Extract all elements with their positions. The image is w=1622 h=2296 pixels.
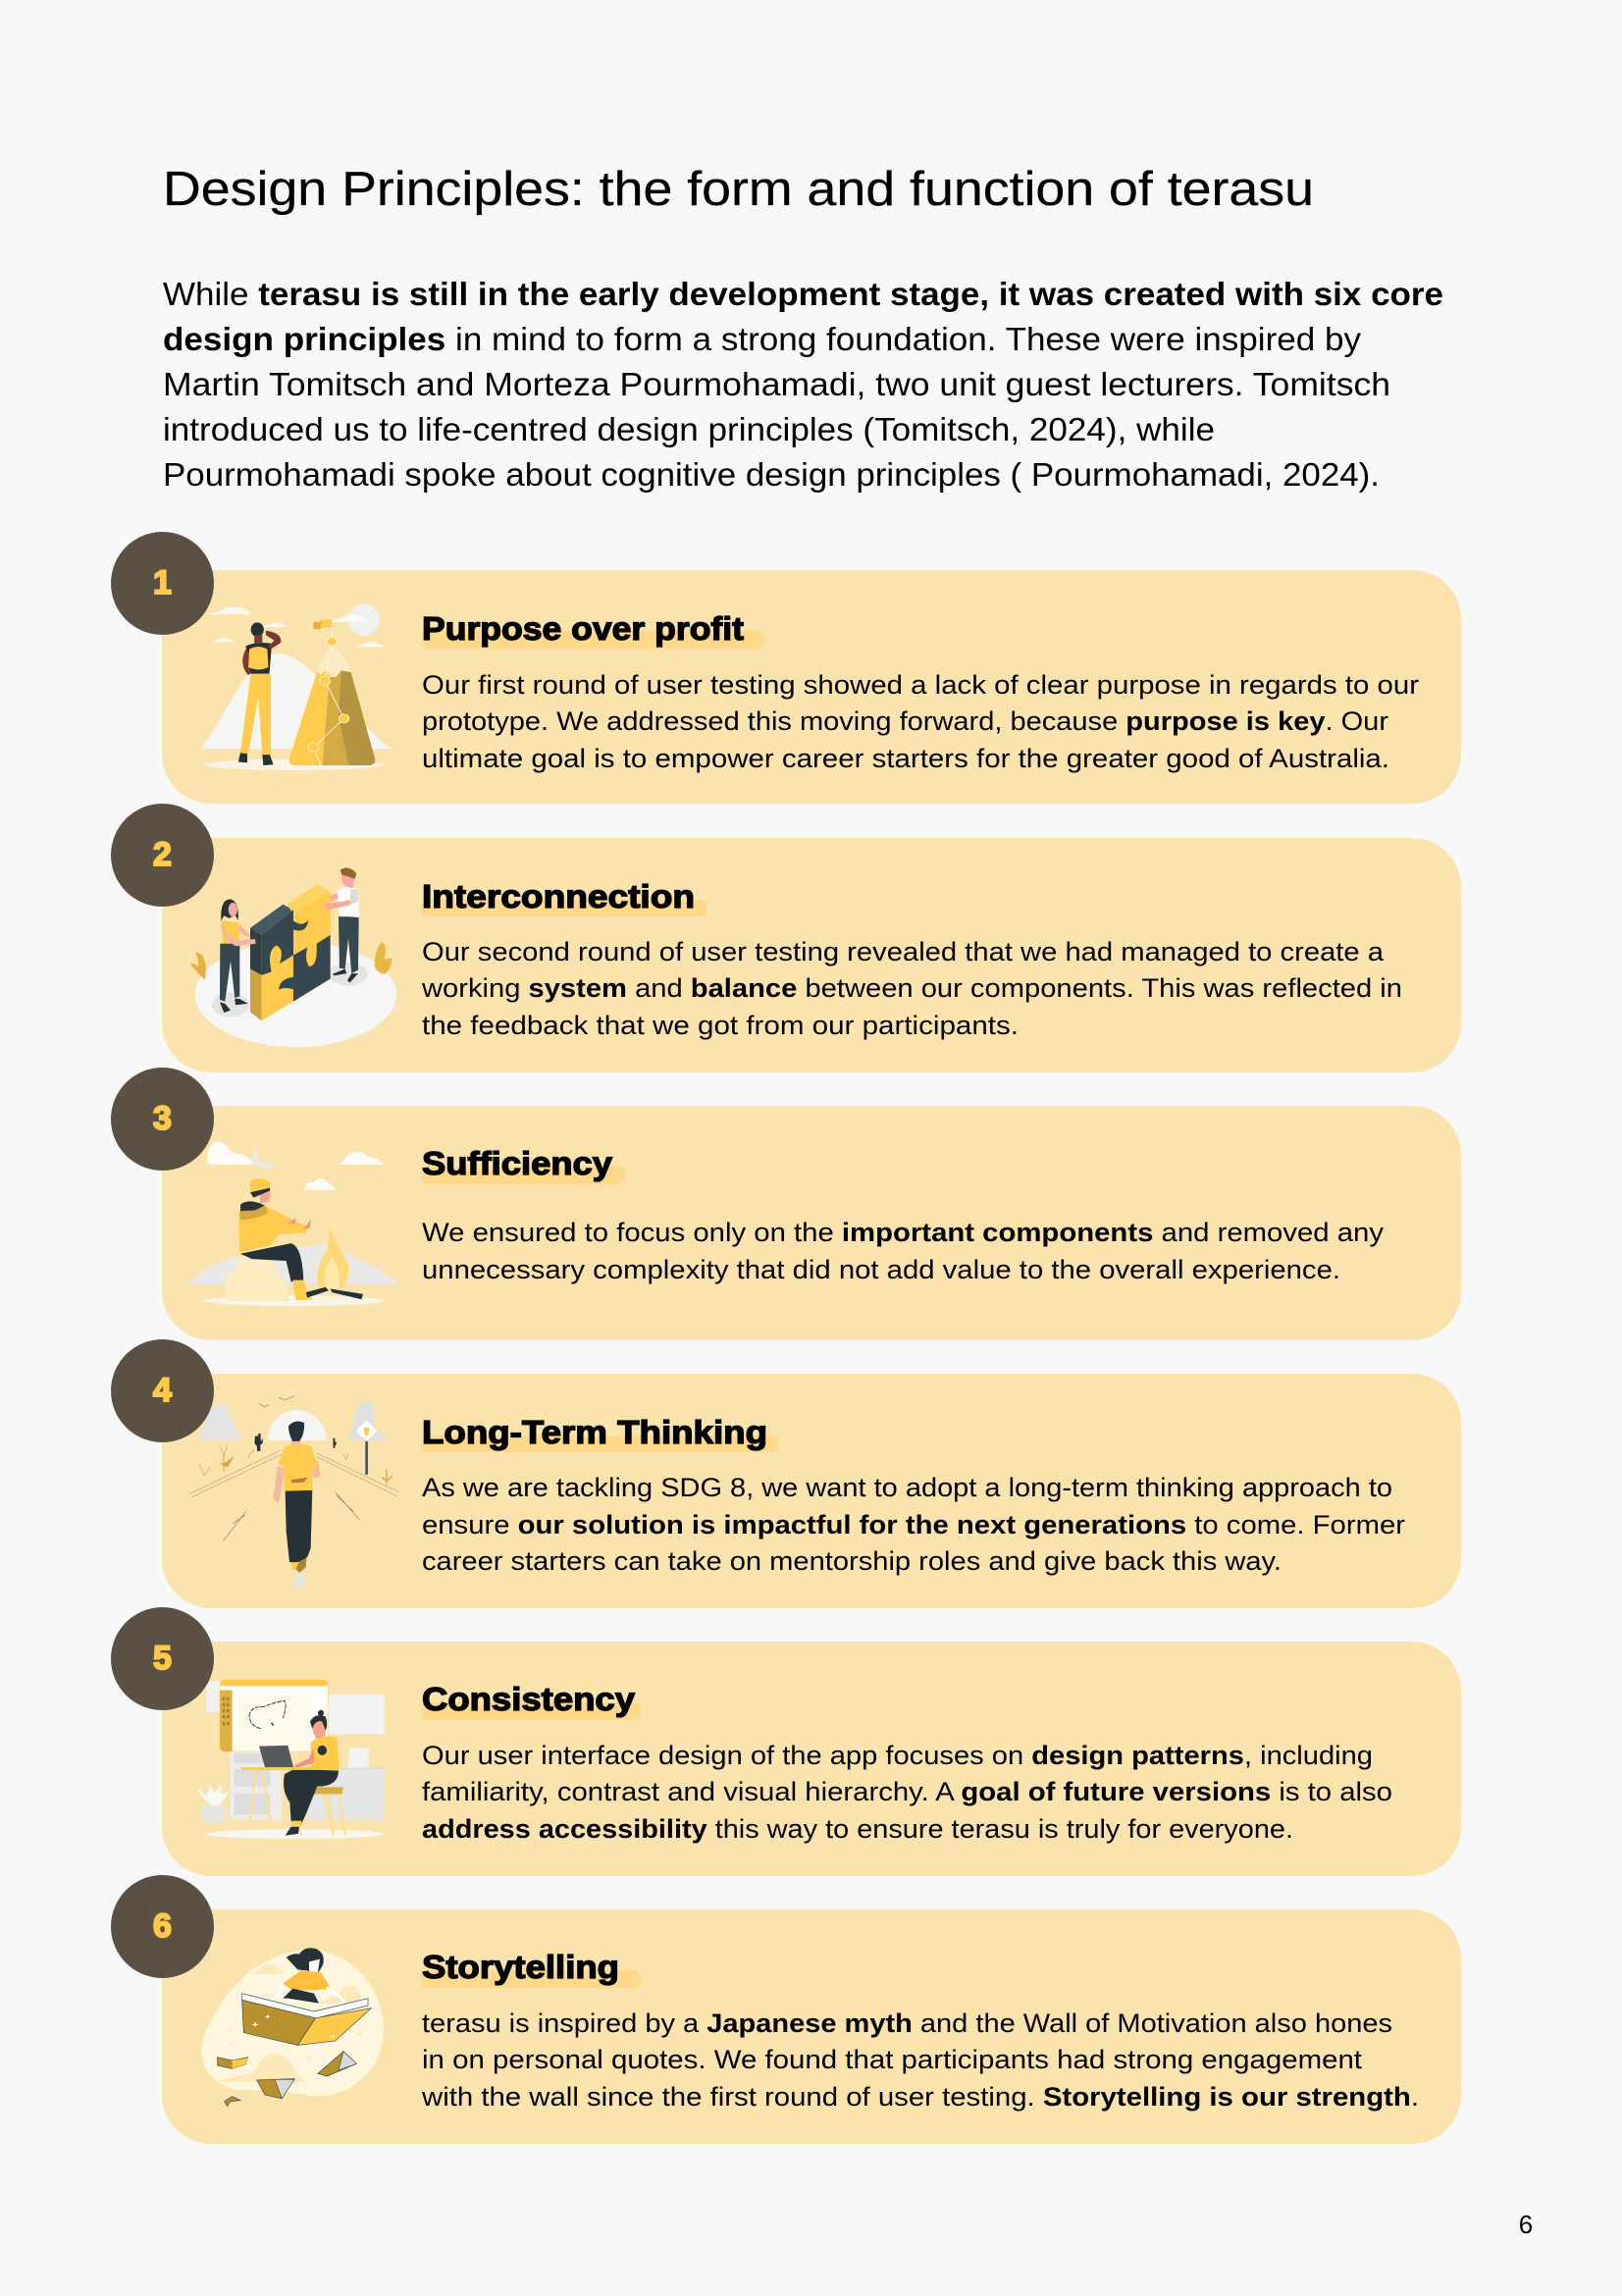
panel: principle 4 long-term thinking: [111, 1339, 1461, 1608]
body text 6: with the wall since the first round of user testing. Storytelling is our strength .: [421, 2082, 1419, 2112]
body text 4: [422, 1473, 1405, 1576]
body text 4: As we are tackling SDG 8, we want to adopt a long-term thinking approach to: [422, 1473, 1392, 1502]
number badge 3: 3: [153, 1100, 172, 1137]
panel: principle 1 purpose over profit: [111, 532, 1461, 804]
body text 5: address accessibility this way to ensure terasu is truly for everyone.: [422, 1814, 1293, 1844]
icon: two people joining puzzle: [190, 867, 396, 1047]
title: Design Principles: the form and function of terasu: [163, 163, 1314, 216]
card background 6: [162, 1909, 1461, 2144]
card background 5: [162, 1642, 1461, 1876]
icon: person at campfire: [188, 1142, 400, 1306]
intro paragraph: Martin Tomitsch and Morteza Pourmohamadi, two unit guest lecturers. Tomitsch: [163, 366, 1390, 402]
intro paragraph: introduced us to life-centred design principles (Tomitsch, 2024), while: [163, 411, 1215, 447]
body text 2: Our second round of user testing revealed that we had managed to create a: [422, 937, 1384, 966]
intro paragraph: Pourmohamadi spoke about cognitive design principles ( Pourmohamadi, 2024).: [163, 456, 1380, 493]
body text 1: prototype. We addressed this moving forward, because purpose is key . Our: [422, 706, 1388, 736]
heading highlight 1: [422, 631, 763, 649]
card background 4: [162, 1374, 1461, 1608]
body text 6: in on personal quotes. We found that participants had strong engagement: [422, 2045, 1363, 2074]
heading highlight 5: [421, 1702, 641, 1720]
number badge 6: [111, 1875, 214, 1978]
body text 3: unnecessary complexity that did not add value to the overall experience.: [422, 1255, 1340, 1284]
number badge 2: [111, 804, 214, 907]
icon: designer at desk with window: [198, 1680, 386, 1839]
body text 2: [421, 937, 1402, 1040]
number badge 3: [111, 1068, 214, 1171]
body text 3: We ensured to focus only on the important components and removed any: [422, 1218, 1385, 1247]
intro paragraph: design principles in mind to form a strong foundation. These were inspired by: [163, 321, 1362, 357]
heading 6: Storytelling: [422, 1949, 619, 1985]
number badge 4: 4: [153, 1372, 172, 1409]
number badge 5: 5: [153, 1640, 172, 1677]
heading 1: Purpose over profit: [422, 610, 744, 647]
body text 1: ultimate goal is to empower career starters for the greater good of Australia.: [422, 744, 1389, 773]
panel: principle 5 consistency: [111, 1607, 1461, 1876]
body text 5: Our user interface design of the app focuses on design patterns , including: [422, 1741, 1373, 1770]
body text 2: working system and balance between our components. This was reflected in: [421, 973, 1402, 1003]
body text 4: ensure our solution is impactful for the next generations to come. Former: [422, 1510, 1405, 1539]
heading highlight 2: [421, 900, 706, 916]
body text 1: Our first round of user testing showed a lack of clear purpose in regards to our: [422, 670, 1419, 700]
number badge 1: 1: [153, 564, 172, 601]
heading 2: Interconnection: [422, 878, 695, 914]
heading 4: Long-Term Thinking: [422, 1414, 767, 1450]
number badge 6: 6: [153, 1907, 172, 1945]
body text 2: the feedback that we got from our participants.: [422, 1011, 1019, 1040]
heading highlight 4: [421, 1435, 778, 1452]
icon: person walking on road: [189, 1396, 399, 1589]
body text 6: terasu is inspired by a Japanese myth and the Wall of Motivation also hones: [422, 2009, 1392, 2038]
number badge 2: 2: [153, 836, 172, 873]
number badge 1: [111, 532, 214, 635]
body text 5: [422, 1741, 1392, 1844]
number badge 4: [111, 1339, 214, 1442]
intro paragraph: While terasu is still in the early development stage, it was created with six core: [163, 276, 1443, 312]
card background 3: [162, 1106, 1461, 1340]
body text 1: [422, 670, 1419, 773]
body text 5: familiarity, contrast and visual hierarchy. A goal of future versions is to also: [422, 1777, 1392, 1806]
page number: 6: [1519, 2210, 1533, 2239]
intro paragraph: [163, 276, 1443, 493]
heading 5: Consistency: [422, 1681, 636, 1717]
body text 3: [422, 1218, 1385, 1284]
card background 1: [162, 570, 1461, 804]
heading 3: Sufficiency: [422, 1145, 613, 1181]
card background 2: [162, 838, 1461, 1072]
panel: principle 3 sufficiency: [111, 1068, 1461, 1340]
number badge 5: [111, 1607, 214, 1710]
body text 4: career starters can take on mentorship roles and give back this way.: [422, 1546, 1282, 1576]
panel: principle 2 interconnection: [111, 804, 1461, 1072]
icon: woman riding open book: [201, 1948, 384, 2107]
heading highlight 6: [421, 1970, 641, 1988]
panel: principle 6 storytelling: [111, 1875, 1461, 2144]
icon: hiker and mountain: [201, 603, 391, 770]
body text 6: [421, 2009, 1419, 2112]
heading highlight 3: [421, 1167, 625, 1184]
